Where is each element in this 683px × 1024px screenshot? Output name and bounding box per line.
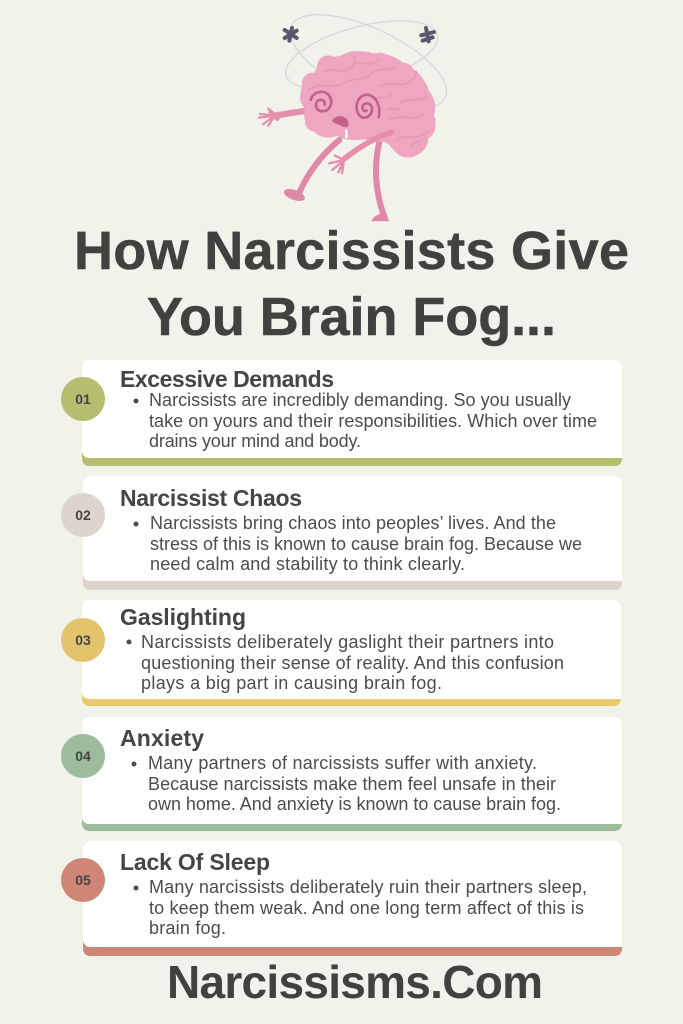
panel: 04 Anxiety: 04 [75,748,91,764]
orbit rings [277,0,459,128]
panel: 01 Excessive Demands: take on yours and their responsibilities. Which over time [149,411,597,431]
icon: stars [285,28,434,41]
title: You Brain Fog... [147,287,556,347]
panel: 05 Lack Of Sleep [61,841,622,956]
panel: 05 Lack Of Sleep: Many narcissists deliberately ruin their partners sleep, [149,877,587,897]
panel: 02 Narcissist Chaos: Narcissists bring chaos into peoples’ lives. And the [150,513,556,533]
panel: 03 Gaslighting: 03 [75,632,91,648]
panel: 03 Gaslighting [61,600,621,706]
panel: 05 Lack Of Sleep: 05 [75,872,91,888]
nose and drip [332,116,349,127]
panel: 04 Anxiety: Many partners of narcissists suffer with anxiety. [148,753,537,773]
panel: 01 Excessive Demands: drains your mind and body. [149,431,361,451]
panel: 01 Excessive Demands: Excessive Demands [120,366,334,392]
illustration: dizzy brain character [259,0,459,221]
panel: 01 Excessive Demands: 01 [75,391,91,407]
panel: 01 Excessive Demands [61,360,622,466]
panel: 03 Gaslighting: plays a big part in causing brain fog. [141,673,442,693]
panel: 04 Anxiety [61,717,622,831]
left arm [259,109,307,126]
eyes: spirals [311,92,379,118]
panel: 03 Gaslighting: questioning their sense of reality. And this confusion [141,653,564,673]
panel: 04 Anxiety: Because narcissists make them feel unsafe in their [148,774,556,794]
panel: 05 Lack Of Sleep: to keep them weak. And one long term affect of this is [149,898,584,918]
legs [282,140,389,221]
title [74,221,629,347]
panel: 02 Narcissist Chaos [61,476,622,590]
panel: 04 Anxiety: Anxiety [120,725,204,751]
panel: 02 Narcissist Chaos: Narcissist Chaos [120,485,302,511]
panel: 02 Narcissist Chaos: stress of this is known to cause brain fog. Because we [150,534,582,554]
front arm [329,132,392,173]
title: How Narcissists Give [74,221,629,281]
brain folds [308,57,428,147]
panel: 02 Narcissist Chaos: need calm and stability to think clearly. [150,554,465,574]
panel: 03 Gaslighting: Narcissists deliberately gaslight their partners into [141,632,554,652]
footer: site name: Narcissisms.Com [167,956,543,1008]
panel: 02 Narcissist Chaos: 02 [75,507,91,523]
panel: 05 Lack Of Sleep: Lack Of Sleep [120,849,270,875]
panel: 04 Anxiety: own home. And anxiety is known to cause brain fog. [148,794,561,814]
panel: 01 Excessive Demands: Narcissists are incredibly demanding. So you usually [149,390,571,410]
brain body [300,51,436,157]
panel: 03 Gaslighting: Gaslighting [120,604,246,630]
panel: 05 Lack Of Sleep: brain fog. [149,918,226,938]
